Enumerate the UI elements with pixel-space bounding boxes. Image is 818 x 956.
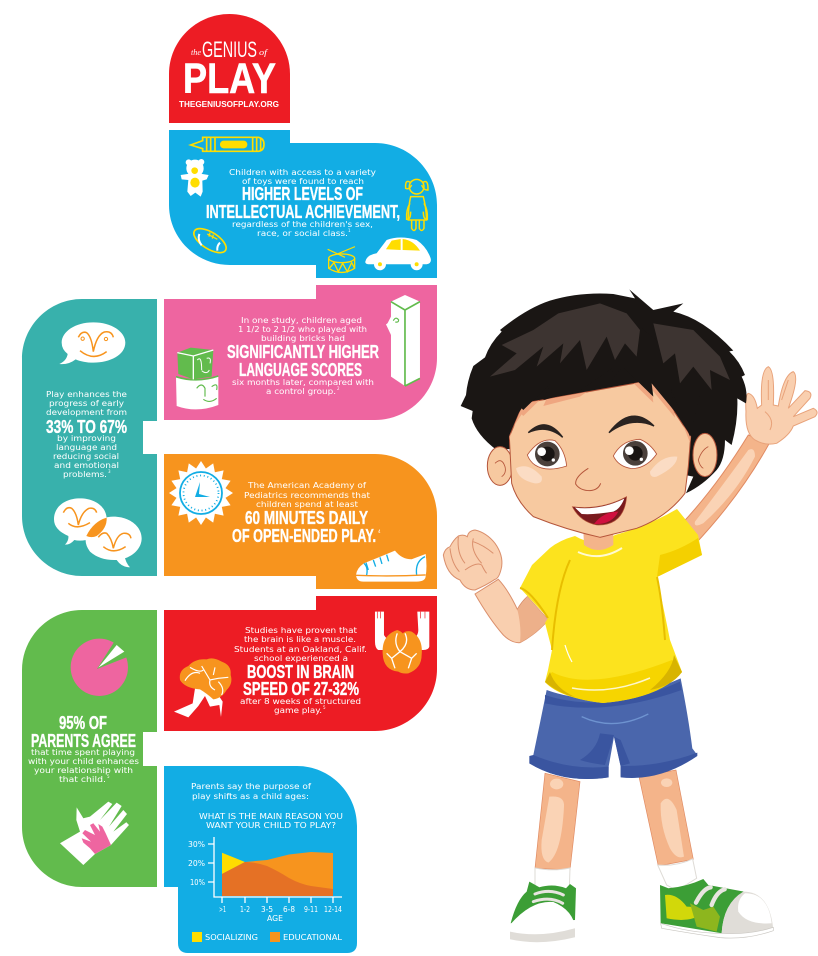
boy left arm and fist [443,530,548,643]
text block: development statistic: 33% TO 67% [46,417,127,437]
neck [583,530,613,550]
text block: parents statistic [28,713,139,784]
text block: parents statistic: your relationship with [34,765,133,775]
icon: running brain [174,658,231,717]
text block: brain statistic: after 8 weeks of structured [240,696,361,706]
face [509,380,691,537]
icon: speech bubble face [59,322,125,364]
area chart: 12-14 [324,904,342,914]
hair highlights right [653,323,730,390]
text block: chart intro [191,781,312,801]
heading: chart question: WHAT IS THE MAIN REASON YOU [199,811,343,821]
text block: language statistic: six months later, compared with [232,377,374,387]
area chart: 9-11 [304,904,318,914]
panel: toys and intellectual achievement [169,130,437,278]
text block: development statistic [46,389,127,479]
text block: development statistic: reducing social [53,451,119,461]
boy head [461,289,747,550]
text block: brain statistic: school experienced a [254,653,348,663]
panel: orange 60 minutes daily [164,454,437,589]
right ear [693,433,717,477]
area chart: 1-2 [240,904,250,914]
logo: The Genius of Play: of [259,48,269,57]
text block: chart intro: play shifts as a child ages: [192,791,309,801]
text block: language statistic: 2 [337,386,340,391]
text block: language statistic: LANGUAGE SCORES [239,360,362,380]
area chart: 30% [188,839,205,849]
logo: The Genius of Play: GENIUS [202,37,257,62]
text block: chart intro: Parents say the purpose of [191,781,312,791]
icon: teddy bear [181,159,209,197]
legend: SOCIALIZING [205,932,258,942]
logo: The Genius of Play: the [191,48,201,57]
boy right arm and hand [681,367,817,546]
cheeks [516,466,542,483]
text block: parents statistic: that time spent playing [31,747,135,757]
area chart: 6-8 [283,904,295,914]
text block: brain statistic: BOOST IN BRAIN [247,662,354,682]
boy legs and socks [535,770,697,891]
left eye [527,440,567,469]
icon: drum [328,247,355,272]
text block: open-ended play statistic: OF OPEN-ENDED PLAY. [232,526,376,546]
text block: toys statistic: race, or social class. [257,228,348,238]
text block: development statistic: development from [46,407,127,417]
text block: development statistic: progress of early [49,398,124,408]
text block: open-ended play statistic: Pediatrics recommends that [244,490,371,500]
text block: open-ended play statistic [232,480,381,546]
text block: toys statistic: INTELLECTUAL ACHIEVEMENT, [206,202,400,222]
icon: clock in sun [169,461,233,525]
icon: flexing brain [375,612,429,673]
area chart: 10% [190,877,205,887]
heading: chart question [199,811,343,830]
text block: toys statistic: HIGHER LEVELS OF [242,184,363,204]
text block: development statistic: 3 [108,469,111,474]
text block: parents statistic: 5 [107,774,110,779]
text block: open-ended play statistic: children spend at least [256,499,359,509]
illustration: waving boy [443,289,817,942]
text block: open-ended play statistic: 4 [378,529,381,534]
icon: toy car [365,237,431,270]
text block: development statistic: and emotional [54,460,119,470]
panel: blue chart of play purpose [164,766,357,953]
left ear [487,447,513,485]
eyebrows [528,416,654,437]
logo: The Genius of Play [169,14,290,123]
panel: red brain speed [164,596,437,731]
text block: open-ended play statistic: The American Academy of [247,480,367,490]
text block: brain statistic: Students at an Oakland, Calif. [234,644,367,654]
text block: parents statistic: PARENTS AGREE [31,731,136,751]
text block: brain statistic: 5 [323,705,326,710]
text block: toys statistic: of toys were found to reach [242,176,364,186]
text block: toys statistic: regardless of the children's sex, [232,219,373,229]
logo: The Genius of Play: THEGENIUSOFPLAY.ORG [179,100,279,109]
text block: parents statistic: 95% OF [59,713,107,733]
forehead shadow [509,382,691,442]
icon: doll [406,179,428,230]
icon: adult and child hands [60,802,129,865]
area chart: 3-5 [261,904,273,914]
icon: football [190,224,230,257]
fringe [507,327,703,440]
boy yellow shirt [520,509,702,703]
area chart: 20% [188,858,205,868]
icon: crayon [191,137,264,151]
legend [192,932,342,942]
icon: pie chart 95 percent [71,639,130,696]
text block: brain statistic: game play. [274,705,322,715]
panel: green parents agree [22,610,157,887]
right eye [613,439,657,469]
text block: development statistic: language and [56,442,117,452]
text block: toys statistic: 1 [348,228,351,233]
panel: building bricks and language scores [164,285,437,420]
hair back [461,289,747,493]
text block: brain statistic: the brain is like a muscle. [244,634,356,644]
icon: tall block with face [386,295,420,386]
icon: two speech bubble faces [54,498,142,567]
text block: language statistic: a control group. [266,386,336,396]
logo: The Genius of Play: PLAY [183,55,276,103]
text block: toys statistic [206,167,400,238]
icon: stacked face blocks [176,348,218,409]
text block: brain statistic: SPEED OF 27-32% [243,679,359,699]
area chart: >1 [219,904,226,914]
text block: brain statistic [234,625,367,715]
text block: language statistic: building bricks had [261,333,345,343]
boy shoes [510,879,773,942]
text block: language statistic: 1 1/2 to 2 1/2 who played with [238,324,367,334]
text block: parents statistic: that child. [59,774,106,784]
text block: development statistic: Play enhances the [46,389,127,399]
area chart: AGE [267,913,283,923]
text block: toys statistic: Children with access to a variety [229,167,376,177]
icon: sneaker [356,551,426,582]
nose [576,468,601,491]
text block: development statistic: problems. [63,469,107,479]
text block: development statistic: by improving [57,433,116,443]
text block: parents statistic: with your child enhances [28,756,139,766]
text block: brain statistic: Studies have proven that [245,625,358,635]
heading: chart question: WANT YOUR CHILD TO PLAY? [206,820,336,830]
area chart [188,837,342,923]
text block: language statistic [227,315,379,396]
mouth [572,497,627,525]
legend: EDUCATIONAL [283,932,342,942]
boy shorts [529,678,697,779]
hair highlights left [490,303,640,377]
text block: language statistic: SIGNIFICANTLY HIGHER [227,342,379,362]
text block: language statistic: In one study, children aged [241,315,362,325]
panel: teal early development [22,299,157,576]
text block: open-ended play statistic: 60 MINUTES DAILY [245,508,368,528]
